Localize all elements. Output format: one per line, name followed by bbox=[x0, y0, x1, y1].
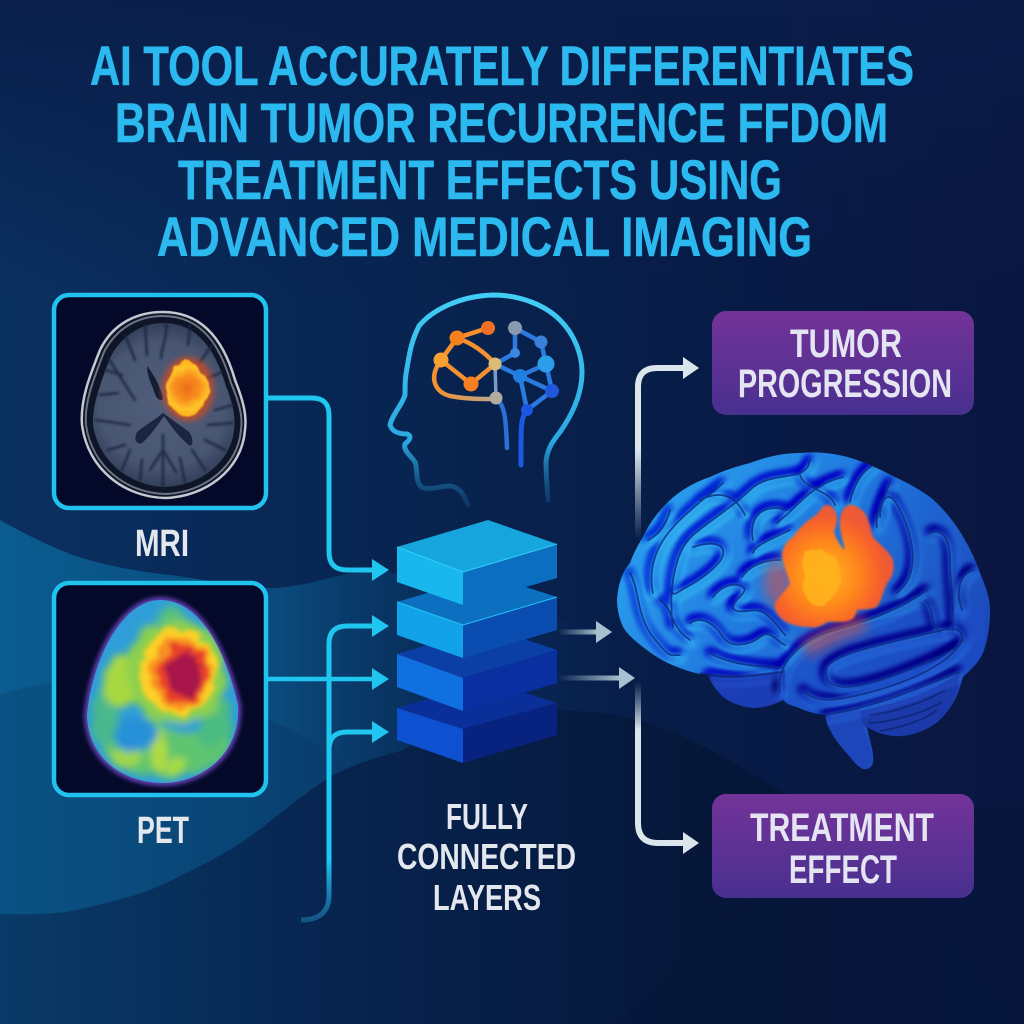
large brain illustration bbox=[617, 452, 990, 770]
orange network bbox=[434, 321, 496, 399]
temporal lobe shade bbox=[780, 606, 985, 715]
box: tumor progression: TUMOR bbox=[790, 322, 902, 366]
label: fully connected layers: LAYERS bbox=[433, 877, 541, 918]
arrow: layers to brain upper bbox=[558, 621, 612, 643]
panel: MRI scan bbox=[54, 295, 266, 508]
arrow: layers to brain lower bbox=[558, 667, 635, 689]
connector: MRI to layers bbox=[268, 398, 389, 581]
label: fully connected layers: CONNECTED bbox=[397, 836, 576, 877]
stacked fully connected layers bbox=[397, 520, 557, 763]
panel: PET scan bbox=[54, 583, 266, 795]
layer 2 bbox=[397, 575, 557, 658]
box: tumor progression bbox=[712, 311, 974, 415]
tumor bbox=[774, 505, 894, 627]
label: PET: PET bbox=[137, 810, 189, 852]
arrow: to treatment effect bbox=[638, 682, 699, 854]
icon: head with neural network bbox=[390, 295, 582, 505]
pillow relief from grooves bbox=[630, 460, 973, 715]
connector: PET to layers bbox=[268, 668, 389, 690]
box: treatment effect: TREATMENT bbox=[750, 806, 934, 850]
arrow: to tumor progression bbox=[638, 357, 699, 538]
tumor glow lower bbox=[805, 622, 865, 650]
title: ADVANCED MEDICAL IMAGING bbox=[157, 205, 812, 268]
title bbox=[90, 34, 914, 268]
icon: MRI brain slice bbox=[82, 312, 246, 498]
layer 3 bbox=[397, 627, 557, 711]
label: fully connected layers: FULLY bbox=[446, 796, 528, 837]
brain base fill bbox=[617, 452, 990, 770]
tumor glow left bbox=[764, 561, 792, 605]
blue network bbox=[495, 328, 559, 465]
label: MRI: MRI bbox=[135, 523, 189, 565]
groove line bbox=[630, 460, 973, 715]
lower frontal shade bbox=[700, 670, 785, 708]
cerebellum bbox=[855, 672, 960, 738]
layer 4 bbox=[397, 681, 557, 763]
icon: PET heat map bbox=[80, 595, 250, 790]
layer 1 bbox=[397, 520, 557, 605]
box: treatment effect: EFFECT bbox=[789, 848, 897, 892]
label: fully connected layers bbox=[397, 796, 576, 918]
tumor hot core bbox=[803, 549, 841, 606]
title: TREATMENT EFFECTS USING bbox=[178, 148, 782, 211]
box: treatment effect bbox=[712, 794, 974, 898]
connector: lower feed to layers bbox=[301, 615, 389, 920]
brain stem bbox=[826, 709, 870, 766]
tumor hotspot bbox=[162, 357, 214, 421]
